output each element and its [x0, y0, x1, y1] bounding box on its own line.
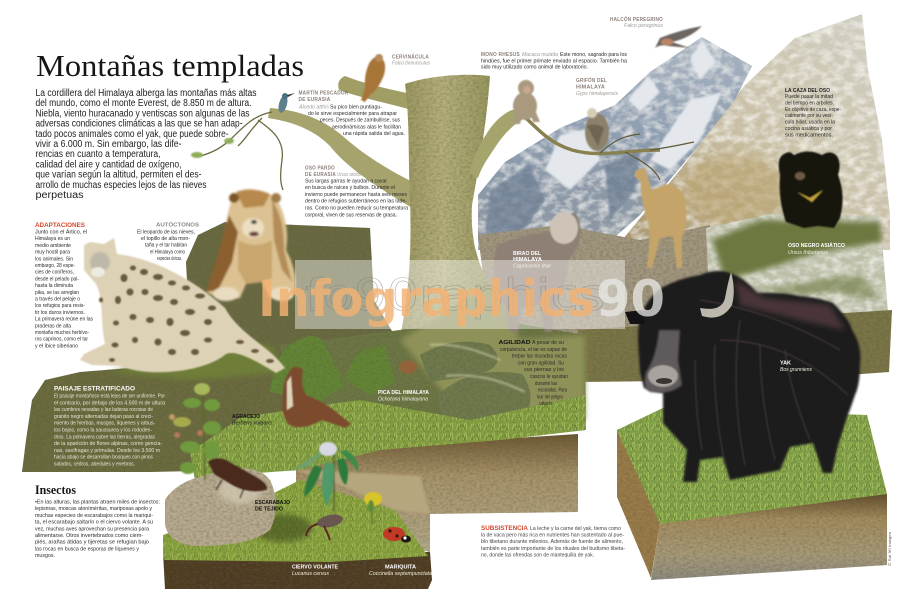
label: mono rhesus: hindúes, fue el primer primate enviado al espacio. También ha	[481, 58, 627, 64]
intro text: rencias en cuanto a temperatura,	[36, 149, 160, 160]
snowy blue mountain	[478, 37, 752, 250]
text: agilidad: A pesar de su	[532, 340, 564, 346]
label: mariquita	[369, 564, 432, 577]
dark grass shadow by the rock	[252, 514, 312, 542]
text: agilidad: durante las	[535, 381, 557, 387]
text: autoctonos: taña y el tar habitan	[145, 243, 187, 249]
watermark outline text: fo90raphics	[305, 270, 605, 321]
rhesus monkey	[513, 80, 540, 124]
intro text: perpetuas	[36, 190, 84, 201]
label: halcon peregrino	[610, 15, 664, 29]
label: oso pardo: DE EURASIA	[305, 172, 336, 178]
text: insectos: ta, el escarabajo saltarín o el ciervo volante. A su	[35, 520, 153, 526]
soil wall	[296, 434, 578, 552]
text: paisaje estratificado: las cumbres nevadas y las laderas rocosas de	[54, 407, 153, 413]
text: insectos: vez, muchas aves aprovechan su presencia para	[35, 526, 149, 532]
text: agilidad: cascos le ayudan	[530, 374, 568, 380]
illustration: mountains and upper ground	[478, 14, 892, 382]
text: adaptaciones: Junto con el Ártico, el	[35, 228, 87, 236]
text: paisaje estratificado: salados, cedros, abedules y enebros.	[54, 462, 135, 468]
right branch	[469, 110, 528, 178]
text: insectos	[35, 483, 160, 559]
text: adaptaciones: muy hostil para	[35, 250, 70, 256]
label: agracejo	[232, 414, 273, 426]
label: oso negro asiatico: Ursus thibetanus	[788, 250, 829, 256]
illustration: left ground with rock	[22, 222, 400, 472]
yak fur highlights	[695, 300, 848, 465]
label: oso pardo: corporal, viven de sus reservas de grasa.	[305, 212, 397, 218]
text: autoctonos: El leopardo de las nieves,	[137, 229, 195, 235]
text: la caza del oso	[785, 88, 841, 138]
griffon vulture	[585, 108, 609, 151]
stag beetle	[306, 512, 344, 540]
text: paisaje estratificado: nas, saxífragas y prímulas. Desde los 3.500 m	[54, 448, 160, 454]
text: adaptaciones: cies de coníferos,	[35, 270, 74, 276]
upper stub branch	[338, 76, 412, 110]
intro text: que varían según la altitud, permiten el des-	[36, 170, 202, 181]
rocky ground behind the animals	[478, 225, 720, 340]
label: martin pescador: do le sirve especialmente para atrapar	[308, 111, 397, 117]
block left side	[617, 430, 660, 578]
text: agilidad	[498, 340, 568, 407]
central hill	[280, 320, 586, 440]
label: cernicalo	[392, 54, 430, 66]
label: birao del himalaya: BIRAO DEL	[513, 251, 542, 257]
yak brown back	[735, 280, 845, 330]
label: martin pescador: DE EURASIA	[298, 97, 330, 103]
text: paisaje estratificado: PAISAJE ESTRATIFICADO	[54, 386, 135, 392]
text: adaptaciones: los animales. Sin	[35, 256, 73, 262]
label: ciervo volante	[292, 564, 339, 577]
label: oso pardo: OSO PARDO	[305, 166, 335, 172]
intro text: adversas condiciones climáticas a las que se han adap-	[36, 119, 242, 130]
boulder highlight	[218, 476, 262, 504]
yak horn	[700, 272, 734, 318]
label: oso pardo: en busca de raíces y bulbos. Durante el	[305, 185, 395, 191]
label: yak: YAK	[780, 360, 791, 366]
label: oso pardo: Ursus arctos	[337, 172, 361, 178]
label: escarabajo de tejido: DE TEJIDO	[255, 506, 283, 512]
text: adaptaciones: montaña muchos herbívo-	[35, 330, 89, 336]
text: insectos: musgos.	[35, 553, 55, 559]
tiger beetle on boulder	[208, 458, 267, 498]
asian black bear	[779, 152, 843, 228]
text: adaptaciones	[35, 222, 93, 349]
label: grifon del himalaya	[576, 76, 618, 97]
twig leaves	[191, 138, 234, 158]
text: adaptaciones: pika, se las arreglan	[35, 290, 79, 296]
text: autoctonos: el Himalaya como	[150, 249, 185, 255]
text: adaptaciones: y el íbice siberiano	[35, 343, 78, 349]
label: cernicalo: CERVINÁCULA	[392, 54, 429, 60]
label: escarabajo de tejido	[255, 500, 290, 512]
label: oso negro asiatico: OSO NEGRO ASIÁTICO	[788, 242, 845, 249]
text: la caza del oso: Puede pasar la mitad	[785, 94, 833, 100]
text: adaptaciones: medio ambiente	[35, 243, 71, 249]
label: mono rhesus: Macaca mulatta	[522, 52, 558, 58]
right twigs	[600, 134, 694, 180]
snow leopard	[80, 238, 285, 373]
text: insectos: las rocas en busca de esporas de líquenes y	[35, 546, 139, 552]
pale soil back	[296, 470, 430, 514]
text: agilidad: sus piernas y los	[524, 367, 564, 373]
label: oso negro asiatico	[788, 242, 845, 256]
rocks	[420, 342, 531, 427]
text: paisaje estratificado: de la aparición de flores alpinas, como gencia-	[54, 441, 162, 447]
text: adaptaciones: ADAPTACIONES	[35, 222, 86, 229]
text: paisaje estratificado: miento de hierbas, musgos, líquenes y arbus-	[54, 421, 155, 427]
block grass blades	[617, 408, 887, 524]
text: autoctonos	[137, 220, 199, 262]
text: agilidad: trepar las riscadas rocas	[512, 354, 567, 360]
thin twigs	[200, 112, 283, 190]
label: agracejo: AGRACEJO	[232, 414, 260, 420]
green tint on slope	[110, 345, 285, 380]
text: adaptaciones: La primavera reúne en las	[35, 317, 93, 323]
label: pica del himalaya: PICA DEL HIMALAYA	[378, 390, 429, 396]
text: la caza del oso: Es objetivo de caza, espe-	[785, 107, 841, 113]
label: pica del himalaya: Ochotona himalayana	[378, 396, 428, 402]
text: agilidad: corpulencia, el tar es capaz de	[500, 347, 567, 353]
text: la caza del oso: LA CAZA DEL OSO	[785, 88, 830, 94]
yak muzzle	[645, 330, 682, 393]
rocky tan mountain	[618, 14, 890, 250]
block grass	[163, 480, 428, 562]
kestrel	[361, 54, 385, 102]
intro text: vivir a 6.000 m. Sin embargo, las dife-	[36, 139, 182, 150]
illustration: animals	[80, 26, 843, 542]
block front soil	[651, 493, 887, 580]
intro text: Niebla, viento huracanado y ventiscas son algunas de las	[36, 108, 250, 119]
illustration: insects soil block	[163, 468, 432, 589]
text: la caza del oso: cocina asiática y por	[785, 126, 832, 132]
text: subsistencia: la de vaca pero más rica en nutrientes han sustentado al pue-	[481, 533, 624, 539]
label: halcon peregrino: HALCÓN PEREGRINO	[610, 15, 663, 23]
illustration: central hill, grass and soil	[190, 285, 586, 552]
label: grifon del himalaya: GRIFÓN DEL	[576, 76, 608, 84]
text: adaptaciones: tir los duros inviernos.	[35, 310, 85, 316]
text: subsistencia: también es parte importante de los rituales del budismo tibeta-	[481, 546, 625, 552]
olive rock block	[578, 310, 892, 382]
intro text	[36, 88, 257, 201]
label: mono rhesus: sido muy utilizado como animal de laboratorio.	[481, 65, 588, 71]
intro text: tado pocos animales como el yak, que puede sobre-	[36, 129, 228, 140]
block grass top	[617, 408, 887, 524]
label: birao del himalaya: HIMALAYA	[513, 257, 542, 263]
text: insectos: muchas especies de escarabajos como la mariqui-	[35, 513, 153, 519]
olive rock platform	[186, 222, 400, 360]
boulder	[165, 468, 276, 546]
text: subsistencia: blo tibetano durante milenios. Además de fuente de alimento,	[481, 539, 623, 545]
label: grifon del himalaya: Gyps himalayensis	[576, 91, 618, 97]
label: pica del himalaya	[378, 390, 429, 402]
text: paisaje estratificado: el contrario, por debajo de los 4.500 m de altura	[54, 400, 165, 406]
text: adaptaciones: Himalaya es un	[35, 236, 70, 242]
barberry shrub	[169, 383, 221, 480]
label: mariquita: MARIQUITA	[385, 564, 416, 570]
takin	[494, 212, 580, 332]
text: la caza del oso: del tiempo en árboles.	[785, 100, 834, 106]
label: agracejo: Berberis vulgaris	[232, 420, 273, 426]
text: adaptaciones: ros caprinos, como el tar	[35, 337, 88, 343]
label: martin pescador: una rápida salida del agua.	[343, 131, 405, 137]
text: paisaje estratificado	[54, 386, 165, 468]
label: mono rhesus	[481, 52, 627, 71]
label: cernicalo: Falco tinnunculus	[392, 60, 430, 66]
yellow flower	[364, 492, 382, 524]
text: insectos: Insectos	[35, 483, 76, 497]
text: autoctonos: el topillo de alta mon-	[141, 236, 190, 242]
ladybug	[383, 527, 411, 542]
title: Montañas templadas	[36, 48, 304, 83]
stoat	[282, 367, 351, 428]
watermark number: 90	[596, 270, 665, 328]
intro text: La cordillera del Himalaya alberga las montañas más altas	[36, 88, 257, 99]
text: agilidad: AGILIDAD	[498, 340, 530, 346]
label: ciervo volante: CIERVO VOLANTE	[292, 564, 339, 570]
block soil	[163, 552, 432, 589]
text: paisaje estratificado: dros. La primavera cubre las tierras, alegradas	[54, 434, 155, 440]
text: insectos: •En las alturas, las plantas atraen miles de insectos:	[35, 500, 160, 506]
label: oso pardo: invierno puede permanecer hasta seis meses	[305, 192, 407, 198]
tan ibex	[634, 168, 686, 268]
label: martin pescador: Su pico bien puntiagu-	[330, 104, 382, 110]
text: insectos: lepismas, moscas atoníméritas, mariposas apolo y	[35, 506, 152, 512]
trunk	[398, 75, 498, 348]
illustration: yak on grass block	[617, 271, 887, 580]
illustration: plants	[169, 383, 382, 524]
text: adaptaciones: praderas de alta	[35, 323, 71, 329]
himalayan pika	[399, 360, 417, 374]
text: adaptaciones: a través del pelaje o	[35, 296, 80, 302]
label: martin pescador: Alcedo atthis	[298, 104, 330, 110]
label: grifon del himalaya: HIMALAYA	[576, 84, 605, 90]
text: paisaje estratificado: granito negro alternadas dejan paso al creci-	[54, 414, 153, 420]
watermark	[258, 260, 665, 329]
text: agilidad: con gran agilidad. Su	[518, 360, 564, 366]
yak body	[638, 271, 860, 482]
text: la caza del oso: cula biliar, usada en la	[785, 120, 835, 126]
label: martin pescador: peces. Después de zambullirse, sus	[320, 118, 400, 124]
label: martin pescador: MARTÍN PESCADOR	[298, 88, 348, 96]
text: adaptaciones: embargo, 28 espe-	[35, 263, 75, 269]
watermark panel	[295, 260, 625, 329]
label: yak: Bos grunniens	[780, 367, 812, 373]
dark rock ridges	[485, 150, 640, 235]
label: oso pardo	[305, 166, 408, 218]
label: oso pardo: Sus largas garras le ayudan a cavar	[305, 178, 387, 184]
label: ciervo volante: Lucanus cervus	[292, 571, 330, 577]
text: autoctonos: especies únicas.	[157, 256, 182, 262]
text: subsistencia: no, donde las ofrendas son de mantequilla de yak.	[481, 552, 594, 558]
label: martin pescador	[298, 88, 405, 137]
label: oso pardo: ras. Como no pueden reducir su temperatura	[305, 206, 408, 212]
intro text: arrollo de muchas especies lejos de las nieves	[36, 180, 207, 191]
label: birao del himalaya: Capricornis thar	[513, 264, 551, 270]
text: adaptaciones: los refugios para resis-	[35, 303, 85, 309]
text: agilidad: escaladas. Para	[538, 388, 567, 394]
label: yak	[780, 360, 812, 373]
grass band	[190, 395, 586, 480]
pale grass by takin	[400, 285, 585, 420]
yak nose	[648, 365, 678, 387]
text: subsistencia	[481, 525, 625, 558]
text: subsistencia: La leche y la carne del yak, tierna como	[530, 526, 621, 532]
text: adaptaciones: desde el pelado pal-	[35, 276, 79, 282]
snow ridges	[545, 40, 722, 190]
block grass blades	[163, 480, 428, 562]
text: agilidad: huir del peligro	[537, 394, 563, 400]
label: birao del himalaya	[513, 251, 551, 270]
yak ear	[625, 310, 645, 324]
text: subsistencia: SUBSISTENCIA	[481, 525, 529, 532]
watermark orange text: Infographics	[258, 270, 595, 328]
text: la caza del oso: sus medicamentos.	[785, 132, 833, 138]
text: autoctonos: AUTÓCTONOS	[156, 220, 199, 228]
intro text: del mundo, como el monte Everest, de 8.850 m de altura.	[36, 98, 252, 109]
label: martin pescador: aerodinámicas alas le facilitan	[332, 124, 401, 130]
text: insectos: alimentarse. Otros invertebrados como ciem-	[35, 533, 143, 539]
illustration: tree	[191, 75, 694, 348]
label: mono rhesus: Este mono, sagrado para los	[560, 52, 627, 58]
label: halcon peregrino: Falco peregrinus	[624, 23, 664, 29]
intro text: calidad del aire y cantidad de oxígeno,	[36, 159, 182, 170]
grass patches	[270, 336, 395, 402]
right thin branch	[522, 114, 660, 154]
kingfisher	[277, 93, 295, 114]
snow plateau with grass	[706, 214, 888, 318]
label: mariquita: Coccinella septempunctata	[369, 571, 432, 577]
text: paisaje estratificado: hacia abajo se desarrollan bosques con pinos	[54, 455, 153, 461]
rock highlights	[430, 345, 525, 392]
text: la caza del oso: cialmente por su vesí-	[785, 113, 833, 119]
left long branch	[268, 108, 426, 216]
green patches on the plateau	[712, 220, 882, 300]
text: paisaje estratificado: El paisaje montañoso está lejos de ser uniforme. Por	[54, 394, 165, 400]
label: mono rhesus: MONO RHESUS	[481, 52, 520, 58]
label: oso pardo: dentro de refugios subterráneos en las lade-	[305, 199, 407, 205]
grass blades on band	[190, 395, 586, 480]
copyright: © Sol 90 Images	[887, 532, 892, 566]
text: insectos: piés, arañas átidas y tijeretas se refugian bajo	[35, 540, 149, 546]
label: escarabajo de tejido: ESCARABAJO	[255, 500, 290, 506]
text: adaptaciones: hasta la diminuta	[35, 283, 73, 289]
peregrine falcon	[652, 26, 702, 54]
text: paisaje estratificado: tos bajos, como la saussurea y los rododen-	[54, 428, 152, 434]
ochre patch on the mountain	[683, 154, 787, 226]
stratified landscape slope	[22, 345, 300, 472]
text: agilidad: saltando.	[539, 401, 553, 407]
white-flowered herb	[293, 442, 358, 512]
brown bear	[206, 189, 296, 301]
